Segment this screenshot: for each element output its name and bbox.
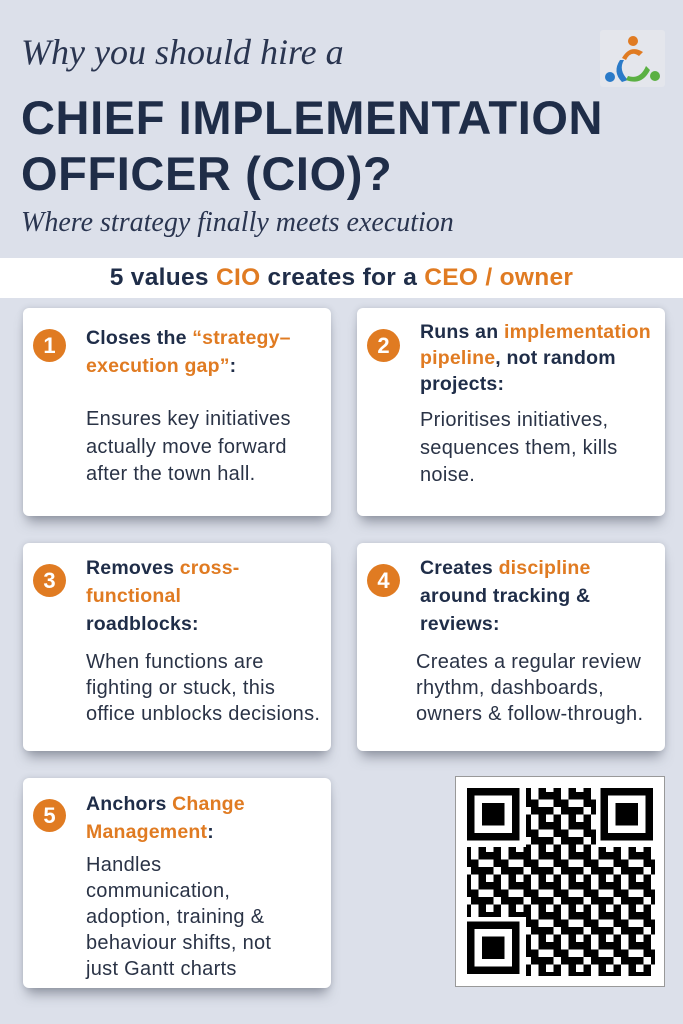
number 1 (33, 329, 66, 362)
body 5: just Gantt charts (86, 958, 237, 980)
body 1: Ensures key initiatives (86, 408, 291, 430)
heading 2 (420, 321, 651, 395)
body 5 (86, 854, 271, 980)
heading 3 (86, 557, 239, 635)
heading 2: pipeline, not random (420, 347, 616, 369)
body 2: Prioritises initiatives, (420, 409, 608, 431)
heading 1: execution gap”: (86, 355, 236, 377)
heading 5 (86, 793, 245, 843)
body 5: adoption, training & (86, 906, 264, 928)
number 4 (367, 564, 400, 597)
panel: value 4 (357, 543, 665, 751)
number 4: 4 (377, 568, 390, 593)
heading 5: Anchors Change (86, 793, 245, 815)
number 3: 3 (43, 568, 56, 593)
heading 1 (86, 327, 291, 377)
body 1 (86, 408, 291, 485)
body 4 (416, 651, 643, 725)
title: main heading: OFFICER (CIO)? (21, 147, 392, 200)
panel: value 5 (23, 778, 331, 988)
body 5: Handles (86, 854, 161, 876)
title: main heading (21, 91, 603, 200)
body 4: Creates a regular review (416, 651, 641, 673)
heading 1: Closes the “strategy– (86, 327, 291, 349)
title: intro line: Why you should hire a (21, 32, 344, 72)
number 5: 5 (43, 803, 56, 828)
body 5: communication, (86, 880, 230, 902)
body 3: fighting or stuck, this (86, 677, 275, 699)
body 1: after the town hall. (86, 463, 255, 485)
heading 3: Removes cross- (86, 557, 239, 579)
heading 3: functional (86, 585, 181, 607)
title: main heading: CHIEF IMPLEMENTATION (21, 91, 603, 144)
number 5 (33, 799, 66, 832)
banner: 5 values CIO creates for a CEO / owner (110, 264, 573, 291)
subtitle: Where strategy finally meets execution (21, 207, 454, 238)
panel: value 1 (23, 308, 331, 516)
body 2 (420, 409, 618, 486)
body 4: rhythm, dashboards, (416, 677, 604, 699)
body 3 (86, 651, 320, 725)
panel: value 3 (23, 543, 331, 751)
body 5: behaviour shifts, not (86, 932, 271, 954)
heading 5: Management: (86, 821, 214, 843)
body 2: noise. (420, 464, 475, 486)
heading 2: Runs an implementation (420, 321, 651, 343)
heading 4: Creates discipline (420, 557, 591, 579)
number 3 (33, 564, 66, 597)
heading 4: around tracking & (420, 585, 590, 607)
body 3: office unblocks decisions. (86, 703, 320, 725)
icon: logo (600, 30, 665, 87)
number 2 (367, 329, 400, 362)
banner (0, 258, 683, 298)
heading 3: roadblocks: (86, 613, 199, 635)
number 1: 1 (43, 333, 56, 358)
heading 4: reviews: (420, 613, 500, 635)
body 2: sequences them, kills (420, 436, 618, 458)
body 3: When functions are (86, 651, 264, 673)
number 2: 2 (377, 333, 390, 358)
heading 4 (420, 557, 591, 635)
heading 2: projects: (420, 373, 504, 395)
body 4: owners & follow-through. (416, 703, 643, 725)
QR code (455, 776, 665, 987)
panel: value 2 (357, 308, 665, 516)
body 1: actually move forward (86, 436, 287, 458)
